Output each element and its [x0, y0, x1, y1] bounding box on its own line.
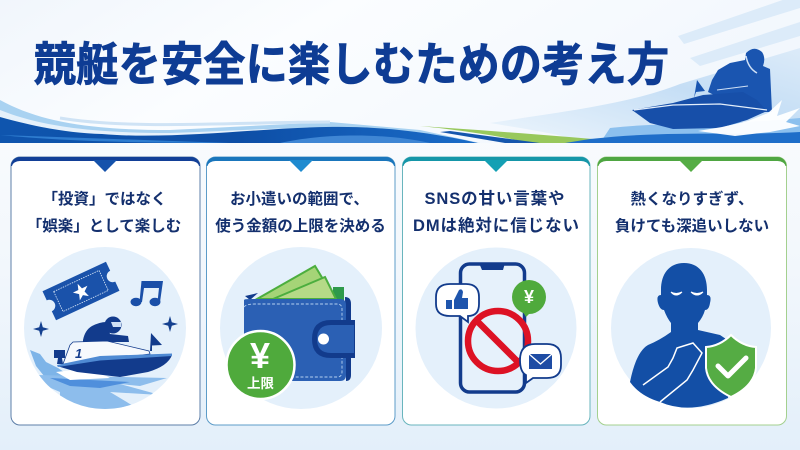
icon: boat with racer [30, 316, 172, 410]
icon: thumbs up bubble [436, 284, 479, 322]
rider [708, 49, 772, 112]
header banner with waves [0, 0, 800, 143]
icon circle [611, 248, 771, 408]
marker [484, 160, 508, 172]
icon: boat with racer: 1 [75, 346, 82, 361]
racer [83, 322, 129, 342]
icon: racer on boat in header [632, 49, 800, 136]
deck [63, 341, 150, 364]
heading: SNSの甘い言葉や [424, 189, 564, 208]
icon circle [24, 247, 186, 409]
heading: お小遣いの範囲で、 [230, 189, 369, 208]
hull [57, 355, 172, 377]
heading: 負けても深追いしない [615, 216, 769, 235]
heading: 「投資」ではなく [42, 189, 167, 208]
banknotes [333, 287, 344, 301]
icon: prohibition sign [468, 311, 528, 371]
icon: sparkles [33, 316, 178, 337]
marker [289, 160, 313, 172]
spray [698, 100, 800, 136]
flag [694, 80, 705, 98]
heading: 使う金額の上限を決める [215, 216, 386, 235]
heading: 「娯楽」として楽しむ [27, 216, 181, 235]
icon: smartphone [460, 263, 524, 392]
icon: ticket [43, 262, 119, 320]
icon: green shield with check [706, 335, 756, 397]
icon: wallet [244, 266, 355, 381]
boat hull [632, 92, 767, 129]
heading: DMは絶対に信じない [413, 216, 579, 235]
flag [150, 333, 162, 351]
icon: calm person [630, 263, 735, 408]
panel: card 1 [11, 157, 200, 425]
icon: mail bubble [520, 344, 561, 383]
icon circle [220, 247, 382, 409]
panel: card 2 [206, 157, 395, 425]
icon: yen bubble: ¥ [524, 287, 534, 307]
icon: yen bubble [512, 280, 546, 317]
icon: music note [130, 281, 163, 306]
badge: yen limit [226, 331, 294, 399]
marker [93, 160, 117, 172]
badge: yen limit: ¥ [250, 335, 270, 376]
marker [679, 160, 703, 172]
heading: 熱くなりすぎず、 [631, 189, 753, 208]
badge: yen limit: 上限 [247, 376, 274, 391]
wallet clasp [312, 320, 355, 358]
panel: card 3 [402, 157, 590, 425]
title: 競艇を安全に楽しむための考え方 [34, 40, 669, 91]
panel: card 4 [598, 157, 786, 425]
motor [54, 350, 65, 364]
icon circle [416, 248, 576, 408]
